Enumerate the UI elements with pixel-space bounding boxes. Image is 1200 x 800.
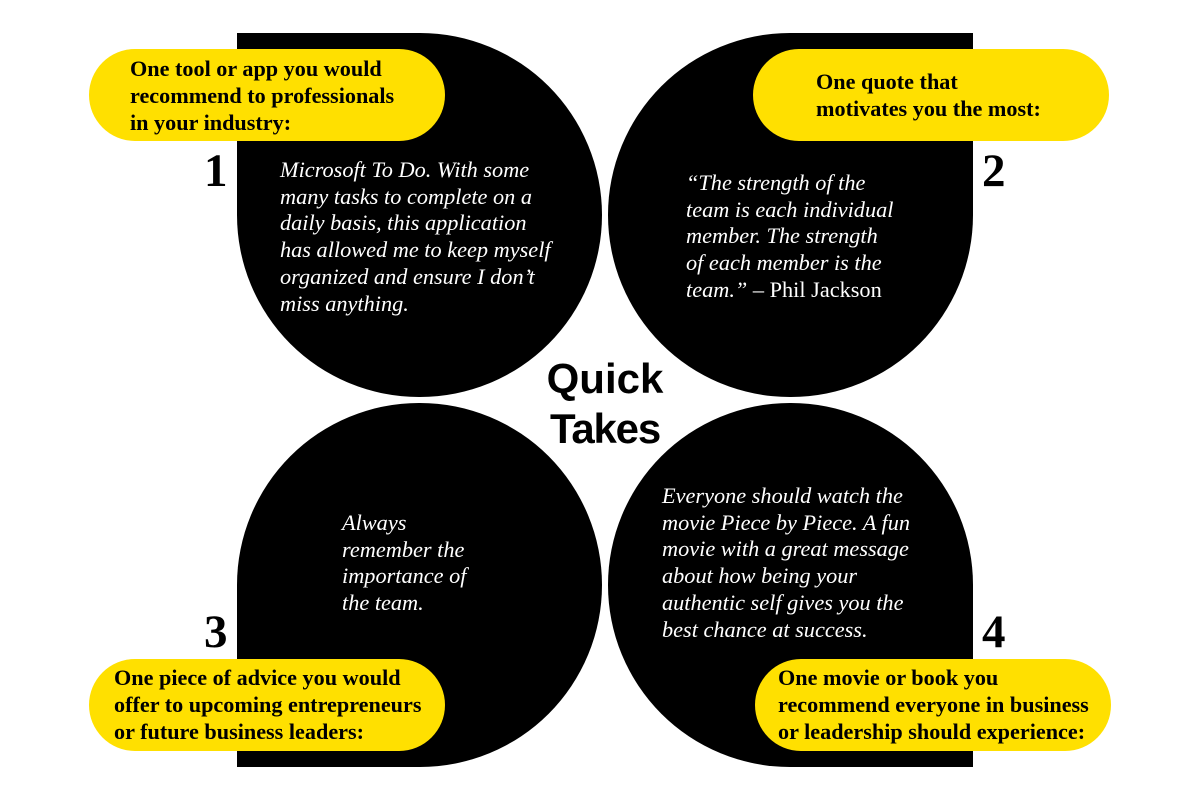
heading 3: or future business leaders:: [114, 719, 364, 744]
title: [547, 355, 664, 452]
answer 1 text: Microsoft To Do. With some: [280, 157, 529, 182]
answer 2 text: member. The strength: [686, 223, 878, 248]
heading 3: [114, 665, 422, 744]
title: Takes: [550, 405, 660, 452]
heading 3: offer to upcoming entrepreneurs: [114, 692, 422, 717]
heading 2: [816, 69, 1041, 121]
answer 3 text: the team.: [342, 590, 424, 615]
answer 2 text: “The strength of the: [686, 170, 865, 195]
answer 4 text: movie with a great message: [662, 536, 909, 561]
yellow label 2: [753, 49, 1109, 141]
answer 3 text: remember the: [342, 537, 464, 562]
heading 4: [778, 665, 1089, 744]
number 4: 4: [982, 606, 1006, 658]
heading 2: motivates you the most:: [816, 96, 1041, 121]
answer 4 text: best chance at success.: [662, 617, 868, 642]
number 3: 3: [204, 606, 228, 658]
yellow label 4: [755, 659, 1111, 751]
heading 1: One tool or app you would: [130, 56, 382, 80]
heading 4: recommend everyone in business: [778, 692, 1089, 717]
answer 3 text: Always: [342, 510, 406, 535]
panel 2 black shape: [608, 33, 973, 397]
heading 1: recommend to professionals: [130, 83, 394, 108]
heading 1: [130, 56, 394, 135]
heading 4: One movie or book you: [778, 665, 998, 690]
yellow label 1: [89, 49, 445, 141]
answer 4 text: [662, 483, 910, 642]
number 1: 1: [204, 145, 228, 197]
answer 2 text: team is each individual: [686, 197, 893, 222]
answer 3 text: importance of: [342, 563, 466, 588]
answer 4 text: movie Piece by Piece. A fun: [662, 510, 910, 535]
answer 1 text: daily basis, this application: [280, 210, 527, 235]
panel 3 black shape: [237, 403, 602, 767]
heading 4: or leadership should experience:: [778, 719, 1085, 744]
answer 2 text: [686, 170, 893, 302]
answer 1 text: many tasks to complete on a: [280, 184, 532, 209]
heading 2: One quote that: [816, 69, 958, 94]
panel 4 black shape: [608, 403, 973, 767]
answer 3 text: [340, 510, 469, 615]
answer 2 text: team.” – Phil Jackson: [686, 277, 882, 302]
number 2: 2: [982, 145, 1006, 197]
panel 1 black shape: [237, 33, 602, 397]
answer 4 text: authentic self gives you the: [662, 590, 903, 615]
yellow label 3: [89, 659, 445, 751]
heading 3: One piece of advice you would: [114, 665, 401, 690]
answer 4 text: about how being your: [662, 563, 857, 588]
answer 2 text: of each member is the: [686, 250, 882, 275]
answer 1 text: miss anything.: [280, 291, 409, 316]
answer 1 text: [280, 157, 554, 316]
answer 4 text: Everyone should watch the: [662, 483, 903, 508]
heading 1: in your industry:: [130, 110, 291, 135]
answer 1 text: organized and ensure I don’t: [280, 264, 535, 289]
answer 1 text: has allowed me to keep myself: [280, 237, 551, 262]
title: Quick: [547, 355, 663, 402]
